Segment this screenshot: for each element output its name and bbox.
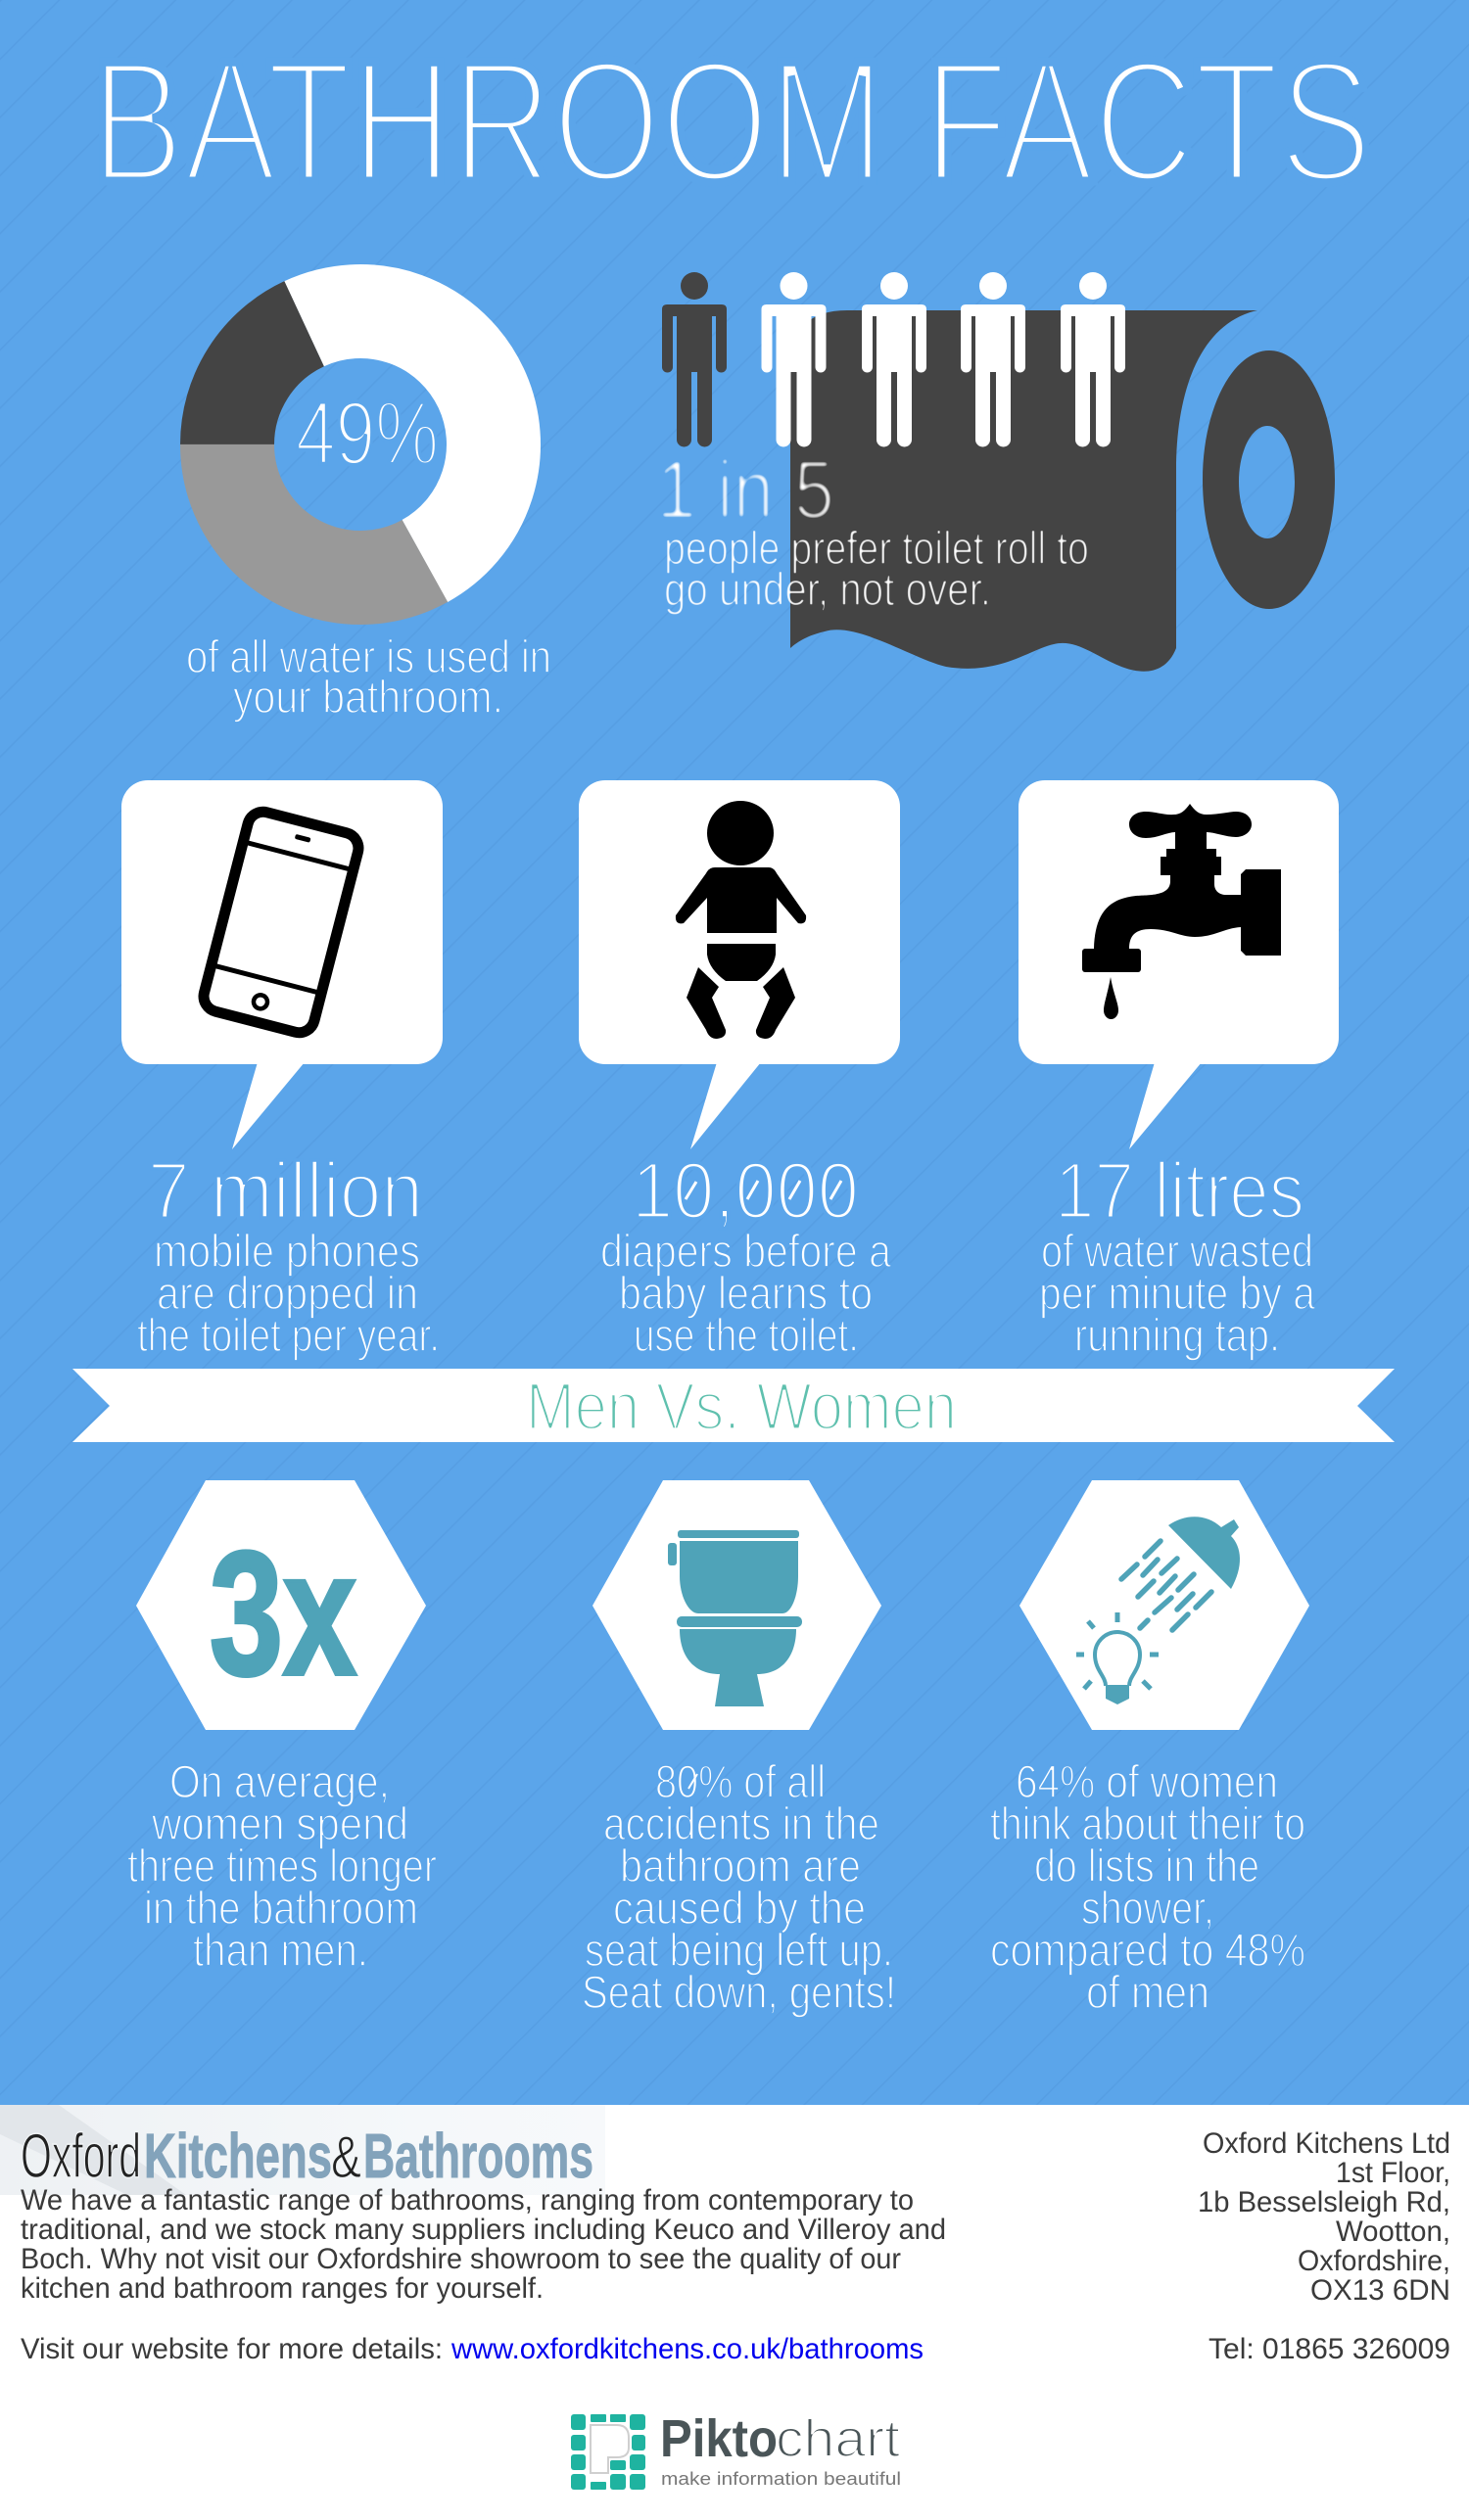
hexagon	[592, 1480, 881, 1730]
ribbon	[72, 1369, 1395, 1442]
icon: white person 4	[1061, 272, 1125, 446]
address: 1st Floor,	[1336, 2157, 1450, 2189]
caption: shower,	[1081, 1882, 1214, 1934]
icon: white person 3	[961, 272, 1025, 446]
caption: seat being left up.	[585, 1924, 893, 1976]
icon: dark person	[662, 272, 727, 446]
stat: 17 litres: 17 litres	[1055, 1146, 1304, 1236]
logo: Piktochart	[571, 2409, 901, 2490]
banner heading: Men Vs. Women	[526, 1369, 957, 1444]
donut caption: of all water is used in	[186, 630, 551, 682]
address: Oxfordshire,	[1298, 2245, 1450, 2277]
icon: dripping tap	[1082, 804, 1281, 1019]
website line	[21, 2333, 924, 2365]
donut chart	[179, 263, 542, 626]
wordmark: chart	[776, 2409, 900, 2468]
website line: www.oxfordkitchens.co.uk/bathrooms	[450, 2333, 924, 2365]
caption: use the toilet.	[634, 1309, 859, 1361]
icon: baby	[676, 801, 806, 1039]
donut value: 49%	[296, 384, 439, 484]
icon: white person 1	[762, 272, 827, 446]
panel: mobile phones fact	[121, 780, 443, 1361]
caption: per minute by a	[1039, 1267, 1316, 1319]
panel: shower thoughts	[990, 1480, 1309, 2018]
caption: Seat down, gents!	[582, 1966, 896, 2018]
panel: toilet roll	[656, 272, 1335, 672]
telephone: Tel: 01865 326009	[1208, 2333, 1450, 2365]
address: Wootton,	[1336, 2216, 1450, 2248]
caption	[582, 1755, 896, 2018]
caption: diapers before a	[600, 1225, 892, 1277]
toilet roll caption: go under, not over.	[664, 563, 991, 615]
logo: Oxford Kitchens & Bathrooms	[0, 2105, 605, 2195]
caption: accidents in the	[603, 1797, 879, 1849]
caption: the toilet per year.	[137, 1309, 440, 1361]
speech bubble	[579, 780, 900, 1149]
caption: 80% of all	[655, 1755, 826, 1807]
caption: think about their to	[990, 1797, 1305, 1849]
footer panel	[0, 2105, 1469, 2520]
panel: water use donut	[179, 263, 551, 723]
caption: bathroom are	[620, 1840, 861, 1891]
hexagon	[1019, 1480, 1309, 1730]
caption: caused by the	[613, 1882, 866, 1934]
company description: We have a fantastic range of bathrooms, ranging from contemporary to	[21, 2184, 914, 2217]
icon: Piktochart mark	[571, 2414, 645, 2490]
logo: Oxford Kitchens & Bathrooms: Bathrooms	[363, 2121, 593, 2191]
caption: than men.	[193, 1924, 368, 1976]
logo: Oxford Kitchens & Bathrooms: &	[331, 2124, 361, 2190]
panel: time in bathroom	[127, 1480, 437, 1976]
panel: running tap fact	[1019, 780, 1339, 1361]
donut caption	[186, 630, 551, 723]
caption: mobile phones	[154, 1225, 420, 1277]
stat: 7 million: 7 million	[148, 1146, 423, 1236]
company description	[21, 2184, 946, 2305]
panel: diapers fact	[579, 780, 900, 1361]
stat: 1 in 5: 1 in 5	[656, 443, 834, 536]
caption: are dropped in	[157, 1267, 418, 1319]
website line: Visit our website for more details:	[21, 2333, 443, 2365]
logo: Oxford Kitchens & Bathrooms: Kitchens	[144, 2121, 332, 2191]
address	[1198, 2127, 1450, 2307]
wordmark	[660, 2409, 900, 2468]
caption: women spend	[151, 1797, 408, 1849]
caption: in the bathroom	[144, 1882, 418, 1934]
toilet roll caption	[664, 522, 1089, 615]
caption	[990, 1755, 1305, 2018]
icon: light bulb	[1076, 1612, 1159, 1704]
caption: of men	[1086, 1966, 1209, 2018]
icon: toilet roll	[790, 310, 1335, 672]
caption	[137, 1225, 440, 1361]
stat: 10,000: 10,000	[632, 1146, 859, 1236]
caption: of water wasted	[1041, 1225, 1313, 1277]
address: Oxford Kitchens Ltd	[1203, 2127, 1450, 2160]
hexagon	[136, 1480, 426, 1730]
caption: baby learns to	[619, 1267, 873, 1319]
caption	[1039, 1225, 1316, 1361]
donut caption: your bathroom.	[233, 671, 503, 723]
company description: traditional, and we stock many suppliers including Keuco and Villeroy and	[21, 2214, 946, 2246]
caption: compared to 48%	[990, 1924, 1305, 1976]
panel: bathroom accidents	[582, 1480, 896, 2018]
logo: Oxford Kitchens & Bathrooms: Oxford	[21, 2121, 141, 2191]
company description: Boch. Why not visit our Oxfordshire showroom to see the quality of our	[21, 2243, 901, 2275]
icon text: 3x: 3x	[210, 1516, 356, 1712]
speech bubble	[121, 780, 443, 1149]
caption: 64% of women	[1016, 1755, 1278, 1807]
caption: On average,	[169, 1755, 390, 1807]
caption	[600, 1225, 892, 1361]
caption: do lists in the	[1034, 1840, 1259, 1891]
speech bubble	[1019, 780, 1339, 1149]
footer background	[0, 2105, 1469, 2520]
address: 1b Besselsleigh Rd,	[1198, 2186, 1450, 2218]
icon: toilet	[668, 1530, 802, 1706]
icon: white person 2	[862, 272, 926, 446]
caption: three times longer	[127, 1840, 437, 1891]
company description: kitchen and bathroom ranges for yourself.	[21, 2272, 544, 2305]
icon: mobile phone	[199, 808, 363, 1037]
caption: running tap.	[1074, 1309, 1280, 1361]
wordmark: Pikto	[660, 2409, 778, 2468]
toilet roll caption: people prefer toilet roll to	[664, 522, 1089, 574]
address: OX13 6DN	[1310, 2274, 1450, 2307]
tagline: make information beautiful	[661, 2469, 901, 2489]
banner: Men Vs. Women	[72, 1369, 1395, 1444]
caption	[127, 1755, 437, 1976]
icon: shower head	[1121, 1517, 1240, 1630]
